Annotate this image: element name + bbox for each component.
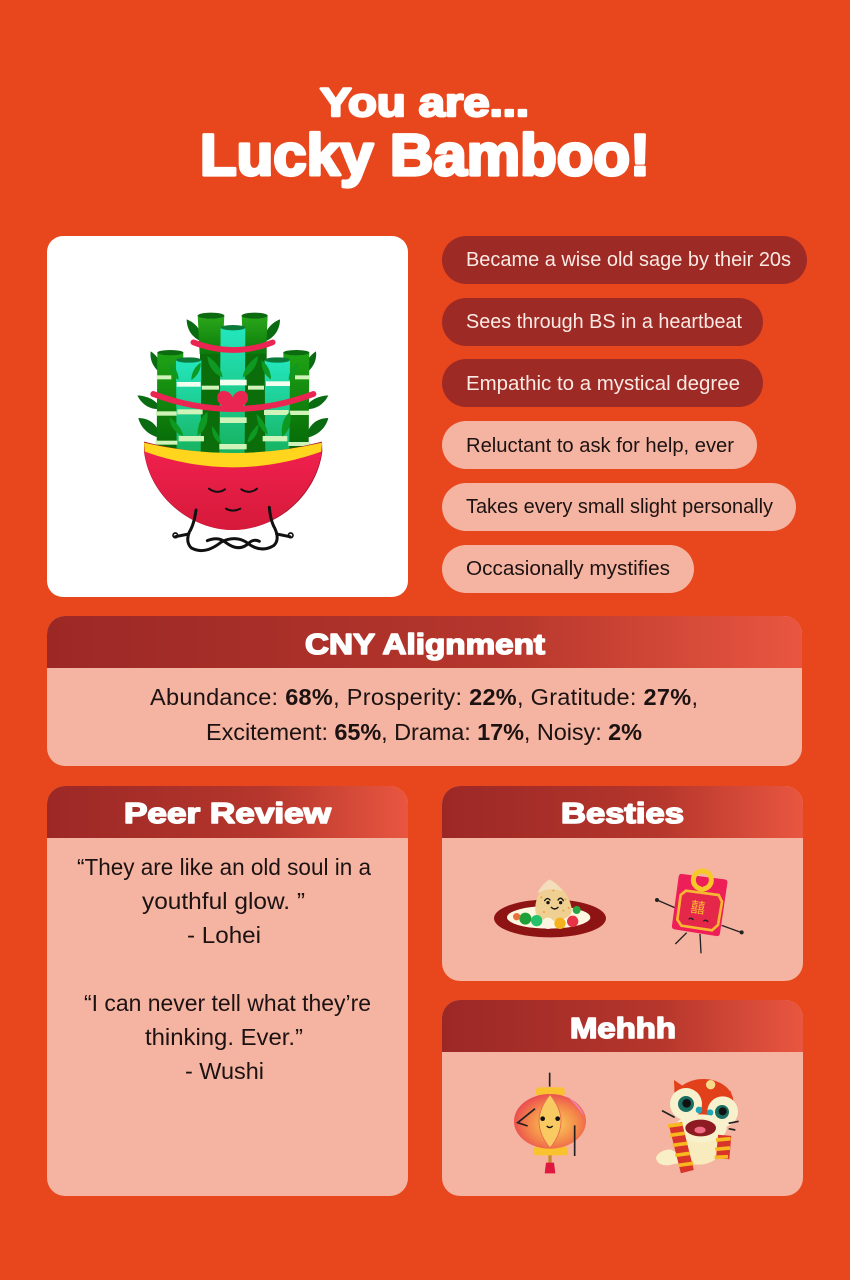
icon: red packet: 囍 (689, 899, 707, 918)
heading: besties: Besties (561, 798, 684, 830)
quote: Lohei: - Lohei (187, 922, 261, 948)
trait pill: slight (442, 483, 796, 531)
heading: CNY alignment: CNY Alignment (305, 629, 545, 661)
icon: lucky bamboo in meditating bowl (137, 313, 328, 551)
trait pill: BS: Sees through BS in a heartbeat (466, 311, 742, 333)
title: You are... (320, 81, 529, 125)
quote: Wushi: - Wushi (185, 1058, 264, 1084)
quote: Lohei (77, 854, 372, 948)
trait pill: help: Reluctant to ask for help, ever (466, 435, 734, 457)
alignment stats line 2: Excitement: 65%, Drama: 17%, Noisy: 2% (206, 719, 642, 745)
panel: character illustration (47, 236, 408, 597)
panel: CNY alignment (47, 616, 802, 766)
icon: lohei plate (494, 879, 606, 937)
trait pill: mystifies: Occasionally mystifies (466, 558, 670, 580)
title: Lucky Bamboo! (200, 123, 650, 188)
quote: Wushi: “I can never tell what they’re (84, 990, 371, 1016)
quote: Lohei: “They are like an old soul in a (77, 854, 372, 880)
panel: peer review (47, 786, 408, 1196)
trait pill: slight: Takes every small slight personally (466, 496, 773, 518)
trait pill: sage: Became a wise old sage by their 20s (466, 249, 791, 271)
panel: mehhh (442, 1000, 803, 1196)
icon: red packet (655, 871, 744, 953)
trait pill: empathic (442, 359, 763, 407)
trait pill: help (442, 421, 757, 469)
trait pill: mystifies (442, 545, 694, 593)
trait pill: BS (442, 298, 763, 346)
quote: Lohei: youthful glow. ” (142, 888, 305, 914)
panel: besties (442, 786, 803, 981)
icon: lantern (514, 1073, 586, 1173)
alignment stats line 1: Abundance: 68%, Prosperity: 22%, Gratitude: 27%, (150, 684, 698, 710)
trait pill: empathic: Empathic to a mystical degree (466, 373, 740, 395)
trait pill: sage (442, 236, 807, 284)
quote: Wushi (84, 990, 371, 1084)
title (200, 81, 650, 188)
heading: mehhh: Mehhh (570, 1013, 676, 1045)
quote: Wushi: thinking. Ever.” (145, 1024, 303, 1050)
heading: peer review: Peer Review (124, 798, 332, 830)
icon: lion dance (656, 1079, 739, 1172)
